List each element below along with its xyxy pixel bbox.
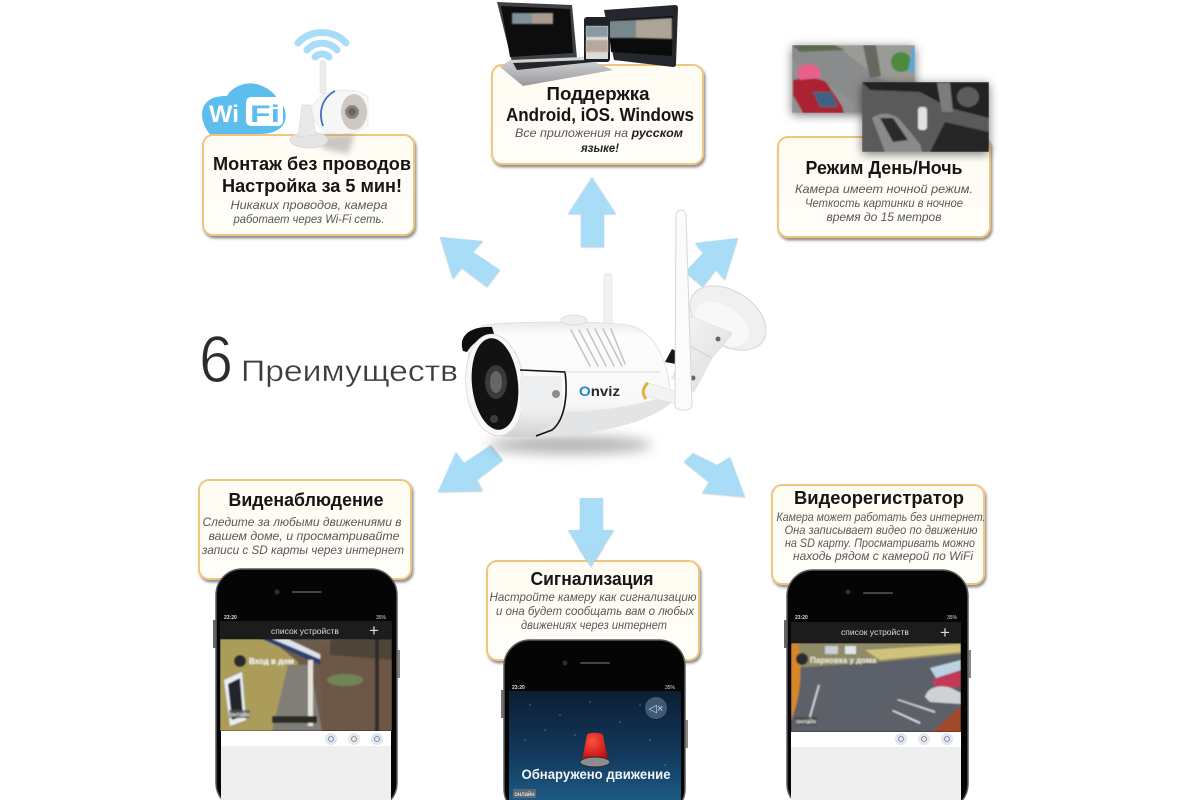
text: surveillance heading: Виденаблюдение bbox=[228, 490, 384, 510]
text: alarm description: движениях через интернет bbox=[521, 618, 667, 632]
text: day night description: Камера имеет ночной режим. bbox=[795, 182, 973, 196]
text: recorder description: находь рядом с камерой по WiFi bbox=[793, 551, 973, 563]
arrow: up-left bbox=[440, 237, 500, 287]
dark sunshield bbox=[462, 327, 494, 352]
housing seam bbox=[520, 370, 566, 436]
phone: camera list parking: список устройств bbox=[841, 627, 909, 637]
phone: camera list entrance: список устройств bbox=[271, 626, 339, 636]
heading: 6 advantages: Преимуществ bbox=[241, 355, 458, 388]
camera body bbox=[468, 322, 672, 438]
arrow tip overlapping alarm card bbox=[578, 546, 604, 567]
text: surveillance description bbox=[201, 515, 404, 557]
image: daytime camera view bbox=[792, 45, 915, 113]
lens face bbox=[461, 331, 529, 439]
panel: day night mode bbox=[778, 45, 990, 237]
text: support heading: Поддержка bbox=[546, 84, 651, 104]
card: platform support bbox=[492, 65, 703, 164]
arrow: down-right bbox=[684, 453, 745, 497]
image: parking lot view: Парковка у дома bbox=[810, 656, 877, 665]
arrow: up bbox=[568, 177, 616, 247]
image: parking lot view bbox=[791, 643, 961, 732]
text: wireless heading: Монтаж без проводов bbox=[213, 154, 411, 174]
text: recorder description bbox=[776, 512, 986, 563]
text: alarm heading: Сигнализация bbox=[530, 569, 654, 589]
text: surveillance description: записи с SD карты через интернет bbox=[201, 543, 404, 557]
heading: 6 advantages: 6 bbox=[199, 322, 233, 396]
phone: motion alarm: 23:20 bbox=[512, 685, 525, 691]
phone: motion alarm: 35% bbox=[665, 685, 676, 691]
panel: platform support bbox=[492, 2, 703, 164]
text: recorder heading: Видеорегистратор bbox=[794, 488, 964, 508]
text: surveillance description: Следите за любыми движениями в bbox=[202, 515, 402, 529]
phone: motion alarm: онлайн bbox=[514, 791, 535, 798]
antenna base bbox=[645, 382, 680, 405]
camera floor shadow bbox=[488, 436, 652, 454]
screw recess bbox=[520, 376, 562, 412]
phone: camera list parking: 23:20 bbox=[795, 615, 808, 621]
small rear antenna bbox=[604, 273, 612, 325]
text: setup heading: Настройка за 5 мин! bbox=[222, 176, 402, 196]
icon: wifi cloud logo: Fi bbox=[250, 101, 280, 128]
icon: wifi cloud logo: Wi bbox=[209, 101, 239, 128]
arrow: up-right bbox=[685, 238, 738, 287]
icon: wifi signal arcs bbox=[298, 32, 346, 57]
icon: laptop bbox=[497, 2, 613, 86]
top dome button bbox=[561, 315, 587, 325]
icon: red siren bbox=[580, 733, 610, 767]
card: wireless installation bbox=[203, 135, 414, 235]
central camera bbox=[461, 210, 778, 454]
main antenna bbox=[675, 210, 692, 410]
gold connector bbox=[643, 383, 648, 399]
text: wireless description bbox=[230, 198, 388, 226]
phone: motion alarm bbox=[501, 640, 688, 800]
phone: camera list parking: 35% bbox=[947, 615, 958, 621]
text: motion detected: Обнаружено движение bbox=[522, 767, 671, 782]
text: wireless description: работает через Wi-Fi сеть. bbox=[233, 212, 384, 226]
icon: tablet bbox=[604, 5, 678, 67]
card: video surveillance bbox=[199, 480, 411, 579]
image: house entrance view: онлайн bbox=[229, 712, 250, 718]
text: recorder description: на SD карту. Просматривать можно bbox=[785, 538, 976, 550]
phone: camera list entrance: 35% bbox=[376, 615, 387, 621]
card: video recorder bbox=[772, 485, 984, 584]
icon: wifi cloud logo bbox=[202, 83, 286, 139]
phone: camera list entrance bbox=[213, 569, 400, 800]
text: day night heading: Режим День/Ночь bbox=[806, 158, 962, 178]
cooling vents bbox=[571, 329, 625, 366]
text: day night description: время до 15 метров bbox=[826, 210, 942, 224]
image: parking lot view: онлайн bbox=[796, 718, 816, 726]
text: alarm description: и она будет сообщать вам о любых bbox=[496, 604, 695, 618]
image: night camera view bbox=[862, 82, 989, 152]
side screw bbox=[552, 390, 560, 398]
phone: camera list entrance: + bbox=[369, 621, 379, 640]
text: recorder description: Она записывает видео по движению bbox=[784, 525, 978, 537]
image: night sky alarm screen bbox=[509, 691, 681, 800]
phone: camera list parking bbox=[784, 570, 971, 800]
arrow: down-left bbox=[438, 445, 503, 492]
text: platforms heading: Android, iOS. Windows bbox=[506, 105, 694, 125]
image: house entrance view bbox=[220, 639, 392, 731]
arrow: down bbox=[568, 498, 614, 567]
text: support description bbox=[515, 126, 683, 155]
icon: small wifi camera bbox=[290, 60, 368, 154]
text: recorder description: Камера может работать без интернет. bbox=[776, 512, 986, 524]
card: day night mode bbox=[778, 137, 990, 237]
text: alarm description bbox=[490, 590, 696, 632]
image: house entrance view: Вход в дом bbox=[249, 657, 294, 666]
image: night sky alarm screen: ◁× bbox=[649, 703, 663, 715]
wall mount bbox=[665, 272, 778, 392]
phone: camera list parking: + bbox=[940, 623, 950, 642]
icon: smartphone bbox=[584, 17, 610, 62]
text: support description: Все приложения на русском bbox=[515, 126, 683, 140]
phone: camera list entrance: 23:20 bbox=[224, 615, 237, 621]
brand logo: Onviz bbox=[579, 384, 620, 399]
text: day night description bbox=[795, 182, 973, 224]
panel: video recorder bbox=[772, 485, 986, 800]
heading: 6 advantages bbox=[199, 322, 458, 396]
text: day night description: Четкость картинки в ночное bbox=[805, 196, 963, 210]
text: wireless description: Никаких проводов, камера bbox=[230, 198, 388, 212]
panel: alarm bbox=[487, 546, 699, 800]
panel: video surveillance bbox=[199, 480, 411, 800]
text: surveillance description: вашем доме, и просматривайте bbox=[208, 529, 400, 543]
card: alarm bbox=[487, 561, 699, 660]
text: alarm description: Настройте камеру как сигнализацию bbox=[490, 590, 696, 604]
lower body shading bbox=[537, 395, 672, 436]
text: support description: языке! bbox=[580, 141, 619, 155]
panel: wireless installation bbox=[202, 32, 414, 235]
